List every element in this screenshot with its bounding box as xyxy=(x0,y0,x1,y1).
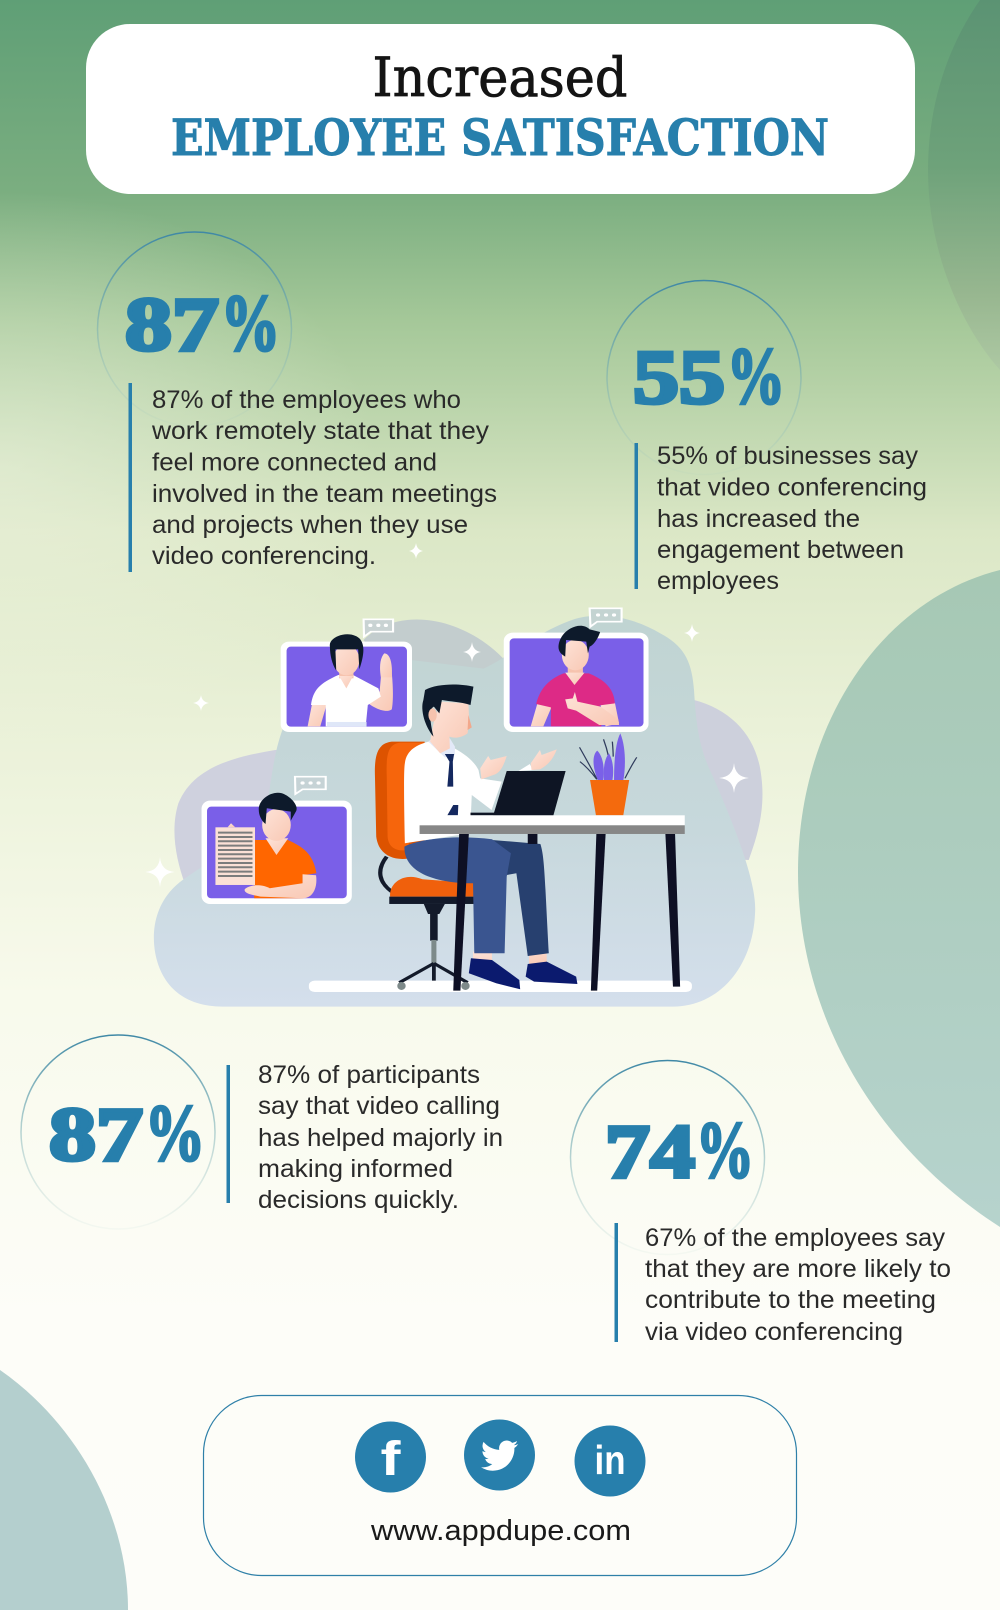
icon: twitter xyxy=(464,1420,535,1490)
office chair xyxy=(375,742,476,990)
title panel xyxy=(86,24,915,194)
stat 2 text: engagement between xyxy=(657,536,904,564)
title: Increased: Increased xyxy=(372,46,628,109)
stat 4: 74 percent xyxy=(570,1060,764,1254)
video card: man with document xyxy=(202,793,352,904)
desk xyxy=(420,815,685,991)
stat 3 text: 87% of participants xyxy=(258,1061,480,1089)
stat 4 text xyxy=(614,1223,951,1346)
stat 3: 87 percent: % xyxy=(145,1088,205,1178)
icon: facebook: f xyxy=(380,1433,402,1486)
stat 4 text: via video conferencing xyxy=(645,1318,903,1346)
stat 4: 74 percent: 74 xyxy=(605,1110,695,1194)
cloud backdrop xyxy=(154,616,762,1007)
illustration: video conference xyxy=(154,608,762,1007)
website url: www.appdupe.com xyxy=(370,1515,631,1547)
stat 1: 87 percent: % xyxy=(221,278,280,368)
stat 2: 55 percent: % xyxy=(727,331,785,421)
background shape: bottom left xyxy=(0,1370,128,1610)
stat 3 text xyxy=(226,1061,503,1214)
stat 1 text: work remotely state that they xyxy=(151,417,490,445)
stat 3 text: say that video calling xyxy=(258,1092,500,1120)
stat 4 text: contribute to the meeting xyxy=(645,1286,936,1314)
man at desk xyxy=(404,684,577,989)
stat 3: 87 percent: 87 xyxy=(49,1093,143,1177)
background shape: right blob xyxy=(798,570,1000,1227)
speech bubble 3 xyxy=(295,777,326,794)
floor xyxy=(309,981,692,992)
stat 3: 87 percent xyxy=(21,1035,215,1229)
video card: man in pink shirt xyxy=(504,626,649,732)
potted plant xyxy=(580,733,637,815)
footer panel xyxy=(204,1396,796,1576)
stat 2: 55 percent: 55 xyxy=(633,336,725,420)
stat 2 text xyxy=(634,442,927,595)
icon: facebook xyxy=(355,1422,426,1492)
speech bubble 1 xyxy=(364,619,393,637)
stat 1 text: 87% of the employees who xyxy=(152,386,461,414)
stat 1 text: video conferencing. xyxy=(152,542,376,570)
stat 3 text: decisions quickly. xyxy=(258,1186,459,1214)
stat 1 text: feel more connected and xyxy=(152,448,437,476)
background light glow xyxy=(0,190,380,750)
background shape: top right xyxy=(928,0,1000,370)
laptop xyxy=(471,771,566,815)
stat 1 text: and projects when they use xyxy=(152,511,468,539)
stat 1: 87 percent xyxy=(98,232,292,426)
stat 3 text: making informed xyxy=(258,1155,453,1183)
stat 1 text: involved in the team meetings xyxy=(152,480,497,508)
stat 4 text: 67% of the employees say xyxy=(645,1224,946,1252)
stat 4: 74 percent: % xyxy=(696,1105,754,1195)
stat 2: 55 percent xyxy=(607,280,801,474)
stat 3 text: has helped majorly in xyxy=(258,1124,503,1152)
stat 1 text xyxy=(128,383,497,572)
icon: linkedin: in xyxy=(594,1437,626,1483)
stat 2 text: employees xyxy=(657,567,779,595)
sparkles xyxy=(145,543,749,887)
speech bubble 2 xyxy=(590,608,622,627)
stat 2 text: 55% of businesses say xyxy=(657,442,919,470)
video card: man waving xyxy=(281,634,412,732)
stat 2 text: that video conferencing xyxy=(657,474,927,502)
title: employee satisfaction: EMPLOYEE SATISFACTION xyxy=(171,108,829,167)
stat 1: 87 percent: 87 xyxy=(125,283,219,367)
icon: linkedin xyxy=(574,1426,646,1496)
stat 4 text: that they are more likely to xyxy=(645,1255,951,1283)
stat 2 text: has increased the xyxy=(657,505,860,533)
